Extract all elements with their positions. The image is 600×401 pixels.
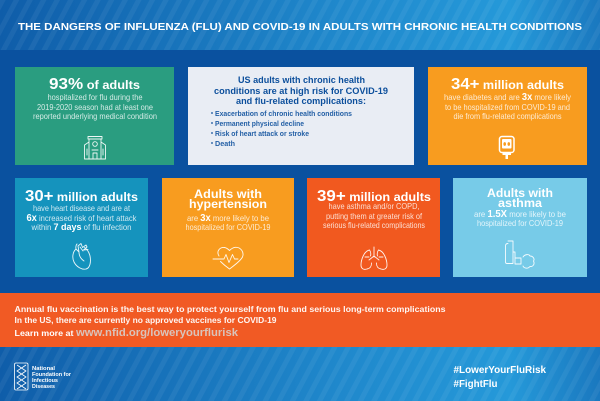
- logo text: Diseases: [32, 384, 55, 390]
- text: hypertension: [186, 213, 271, 232]
- heading: high risk: conditions are at high risk for COVID-19: [214, 86, 388, 97]
- text: learn more: Learn more at: [14, 328, 74, 338]
- heading: high risk: [214, 75, 388, 107]
- hashtags: #FightFlu: [454, 379, 498, 390]
- heading: 93% of adults: 93% of adults: [49, 76, 140, 93]
- text: hospitalized: [33, 93, 157, 121]
- list: complications: Exacerbation of chronic health conditions: [215, 109, 352, 118]
- text: asthma: hospitalized for COVID-19: [477, 219, 563, 228]
- hashtags: [454, 365, 546, 390]
- icon: heart: [73, 244, 90, 269]
- text: hypertension: are 3x more likely to be: [187, 213, 269, 224]
- text: hospitalized: reported underlying medical condition: [33, 112, 157, 121]
- header background: [0, 0, 600, 50]
- heading: 39+ million adults: 39+ million adults: [317, 188, 431, 205]
- text: COPD: [323, 202, 425, 230]
- text: heart disease: 6x increased risk of heart attack: [26, 213, 137, 224]
- heading: high risk: US adults with chronic health: [238, 75, 365, 86]
- text: diabetes: to be hospitalized from COVID-19 and: [445, 103, 570, 112]
- heading: adults with asthma: asthma: [498, 196, 542, 210]
- text: diabetes: die from flu-related complications: [454, 112, 562, 121]
- list: complications: Permanent physical decline: [215, 119, 304, 128]
- text: heart disease: within 7 days of flu infection: [31, 222, 132, 233]
- link: nfid url: www.nfid.org/loweryourflurisk: [75, 327, 239, 339]
- heading: adults with hypertension: [189, 187, 267, 211]
- icon: inhaler: [506, 241, 534, 268]
- logo text: National: [32, 366, 55, 372]
- text: hypertension: hospitalized for COVID-19: [186, 223, 271, 232]
- text: diabetes: have diabetes and are 3x more likely: [444, 92, 572, 103]
- heading: 30+ million adults: 30+ million adults: [25, 188, 138, 205]
- list: complications: [211, 109, 352, 148]
- text: diabetes: [444, 92, 572, 121]
- text: asthma: [474, 209, 566, 228]
- panel: hypertension: [162, 178, 294, 277]
- heading: 34+ million adults: 34+ million adults: [451, 76, 564, 93]
- text: COPD: have asthma and/or COPD,: [328, 202, 420, 211]
- text: heart disease: have heart disease and are at: [33, 204, 131, 213]
- text: hospitalized: 2019-2020 season had at least one: [37, 103, 153, 112]
- icon: heart with pulse: [213, 247, 243, 269]
- text: vaccination: Annual flu vaccination is the best way to protect yourself from flu and serious long-term complications: [14, 304, 446, 314]
- panel: COPD: [307, 178, 440, 277]
- heading: adults with asthma: [487, 186, 553, 210]
- logo text: Infectious: [32, 378, 58, 384]
- list: complications: Risk of heart attack or stroke: [215, 129, 309, 138]
- icon: glucose meter: [500, 136, 514, 159]
- icon: DNA helix: [14, 363, 28, 390]
- text: hospitalized: hospitalized for flu during the: [48, 93, 143, 102]
- text: COPD: putting them at greater risk of: [326, 212, 423, 221]
- logo text: Foundation for: [32, 372, 72, 378]
- text: asthma: are 1.5X more likely to be: [474, 209, 566, 220]
- text: heart disease: [26, 204, 137, 233]
- list: complications: Death: [215, 139, 235, 148]
- heading: adults with hypertension: Adults with: [194, 187, 262, 201]
- heading: high risk: and flu-related complications:: [236, 96, 366, 107]
- logo: NFID: [14, 363, 72, 390]
- footer background: [0, 347, 600, 401]
- icon: lungs: [361, 247, 387, 269]
- panel: heart disease: [15, 178, 148, 277]
- middle background band: [0, 50, 600, 293]
- panel: diabetes: [428, 67, 587, 165]
- panel: high risk list: [188, 67, 414, 165]
- text: COPD: serious flu-related complications: [323, 221, 425, 230]
- hashtags: #LowerYourFluRisk: [454, 365, 546, 376]
- text: no approved vaccines: In the US, there are currently no approved vaccines for COVID-19: [14, 315, 277, 325]
- panel: 93% of adults: [15, 67, 174, 165]
- icon: hospital: [84, 136, 106, 159]
- heading: adults with asthma: Adults with: [487, 186, 553, 200]
- logo text: [32, 366, 72, 390]
- heading: adults with hypertension: hypertension: [189, 197, 267, 211]
- panel: asthma: [453, 178, 587, 277]
- banner: call to action: [0, 293, 600, 347]
- title: THE DANGERS OF INFLUENZA (FLU) AND COVID-19 IN ADULTS WITH CHRONIC HEALTH CONDITIONS: [18, 21, 582, 33]
